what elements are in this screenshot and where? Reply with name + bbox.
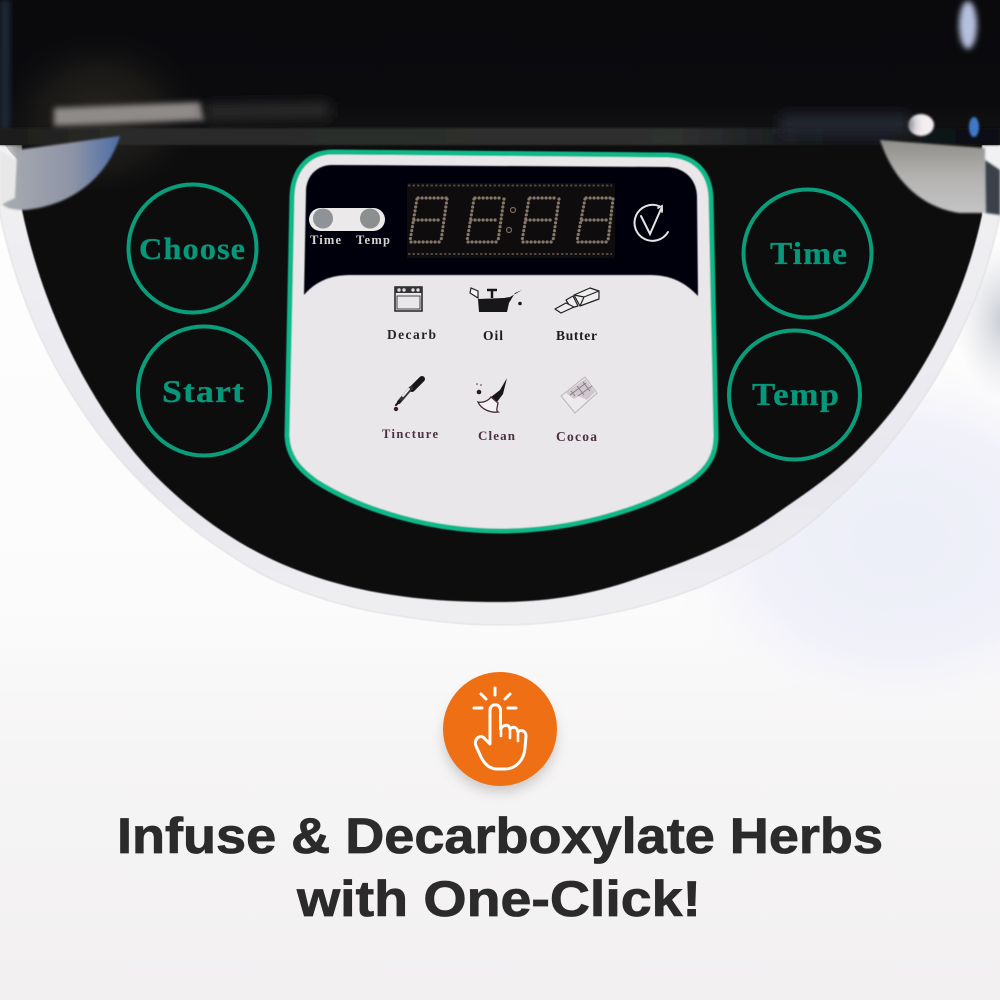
right corner bracket [880, 140, 1000, 215]
headline [117, 808, 883, 927]
icon: broom (Clean) [476, 378, 507, 412]
button: Temp: Temp [752, 376, 840, 412]
icon: check timer [635, 205, 668, 241]
button: Temp [729, 330, 860, 460]
icon: butter [555, 288, 599, 313]
label: Cocoa: Cocoa [556, 429, 597, 444]
left corner bracket [0, 136, 120, 210]
digit 3 [522, 198, 559, 242]
icon: orange badge with clicking hand [443, 672, 557, 792]
LED readout [407, 183, 615, 258]
appliance body [0, 140, 1000, 625]
icon: chocolate (Cocoa) [561, 377, 597, 413]
button: Choose: Choose [139, 231, 246, 266]
digit 1 [410, 198, 447, 242]
button: Time: Time [770, 235, 848, 271]
black display window [304, 165, 698, 296]
lid highlight left [54, 102, 205, 126]
dark lid [0, 0, 1000, 190]
digit 4 [577, 198, 613, 242]
Time / Temp indicator: Time [310, 233, 341, 247]
icon: oil can [470, 288, 522, 312]
label: Clean: Clean [478, 428, 516, 443]
label: Oil: Oil [483, 328, 503, 343]
headline: Infuse & Decarboxylate Herbs [117, 808, 883, 864]
icon: dropper (Tincture) [394, 379, 422, 411]
button: Choose [128, 184, 256, 312]
digit 2 [467, 198, 504, 242]
central display panel [287, 152, 716, 531]
label: Butter: Butter [556, 328, 597, 343]
button: Time [744, 190, 872, 318]
Time / Temp indicator [309, 208, 390, 247]
button: Start [138, 326, 270, 456]
black control face [22, 140, 982, 602]
Time / Temp indicator: Temp [356, 233, 390, 247]
label: Tincture: Tincture [382, 427, 438, 441]
lid highlight right [908, 114, 934, 136]
label: Decarb: Decarb [387, 327, 436, 342]
panel outline [287, 152, 716, 531]
white rim [0, 140, 1000, 625]
headline: with One-Click! [296, 871, 701, 927]
button: Start: Start [162, 373, 245, 409]
icon: oven (Decarb) [395, 287, 422, 311]
